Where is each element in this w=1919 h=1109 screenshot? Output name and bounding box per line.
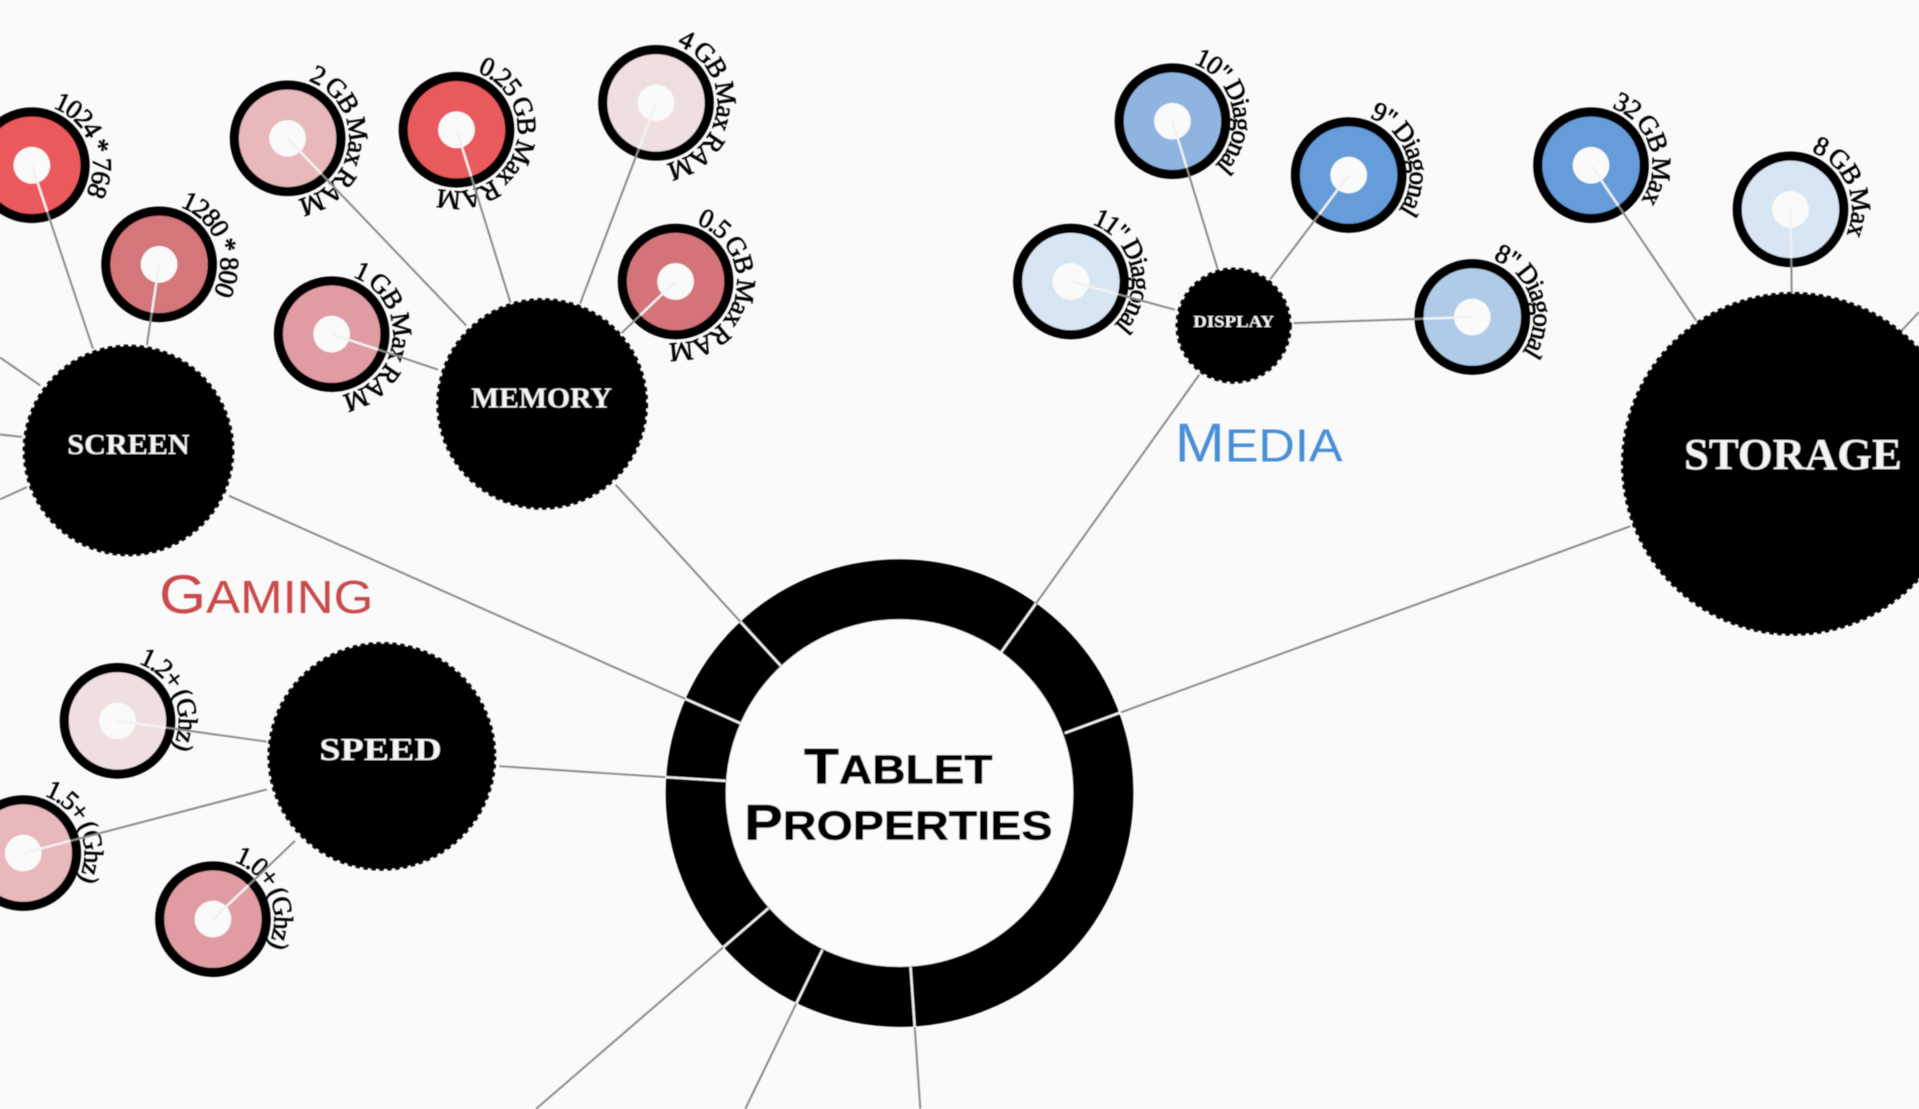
leaf node: 1024 * 768: 1024 * 768 <box>54 94 112 200</box>
hub: Screen <box>24 346 233 554</box>
leaf node: 0.5 GB Max RAM: 0.5 GB Max RAM <box>668 208 756 362</box>
hub: Display <box>1177 269 1290 382</box>
leaf node: 1 GB Max RAM: 1 GB Max RAM <box>342 262 412 413</box>
leaf node: 32 GB Max <box>1532 92 1672 224</box>
category label: Media: MEDIA <box>1175 411 1343 473</box>
leaf node: 2 GB Max RAM <box>228 64 368 218</box>
hub: Screen: SCREEN <box>67 430 190 461</box>
leaf node: 1024 * 768 <box>0 94 112 224</box>
central ring: Tablet Properties <box>666 589 1121 1027</box>
leaf node: 8 GB Max: 8 GB Max <box>1812 136 1872 238</box>
leaf node: 0.25 GB Max RAM: 0.25 GB Max RAM <box>436 57 536 210</box>
hub: Memory: MEMORY <box>471 384 612 415</box>
leaf node: 1.0+ Ghz: 1.0+ (Ghz) <box>235 848 294 950</box>
leaf node: 1.2+ Ghz <box>58 649 199 780</box>
hub: Memory <box>438 300 646 508</box>
leaf node: 1280 * 800 <box>100 192 240 324</box>
leaf node: 8 inch diagonal: 8" Diagonal <box>1494 244 1548 361</box>
leaf node: 1.0+ Ghz <box>154 848 294 978</box>
leaf node: 9 inch diagonal: 9" Diagonal <box>1370 102 1425 219</box>
leaf node: 10 inch diagonal <box>1114 50 1250 180</box>
category label: Gaming: GAMING <box>159 563 373 625</box>
leaf node: 1.5+ Ghz <box>0 781 104 912</box>
leaf node: 2 GB Max RAM: 2 GB Max RAM <box>298 64 368 218</box>
leaf node: 4 GB Max RAM: 4 GB Max RAM <box>666 32 737 182</box>
leaf node: 10 inch diagonal: 10" Diagonal <box>1194 50 1250 177</box>
leaf node: 4 GB Max RAM <box>597 32 737 182</box>
leaf node: 8 inch diagonal <box>1414 244 1548 376</box>
hub: Storage: STORAGE <box>1684 430 1902 479</box>
central ring: Tablet Properties: PROPERTIES <box>744 795 1053 851</box>
leaf node: 32 GB Max: 32 GB Max <box>1612 92 1672 207</box>
leaf node: 11 inch diagonal: 11" Diagonal <box>1093 210 1148 336</box>
leaf node: 8 GB Max <box>1732 136 1872 268</box>
leaf node: 0.5 GB Max RAM <box>616 208 756 362</box>
leaf node: 1.5+ Ghz: 1.5+ (Ghz) <box>45 781 104 884</box>
leaf node: 11 inch diagonal <box>1012 210 1148 340</box>
leaf node: 1280 * 800: 1280 * 800 <box>181 192 240 298</box>
central ring: Tablet Properties: TABLET <box>804 738 993 794</box>
leaf node: 1 GB Max RAM <box>273 262 412 413</box>
leaf node: 1.2+ Ghz: 1.2+ (Ghz) <box>140 649 199 752</box>
hub: Display: DISPLAY <box>1193 312 1275 331</box>
hub: Speed: SPEED <box>319 732 442 767</box>
hub: Storage <box>1623 294 1919 634</box>
leaf node: 9 inch diagonal <box>1290 102 1425 234</box>
leaf node: 0.25 GB Max RAM <box>398 57 536 210</box>
hub: Speed <box>269 644 494 869</box>
